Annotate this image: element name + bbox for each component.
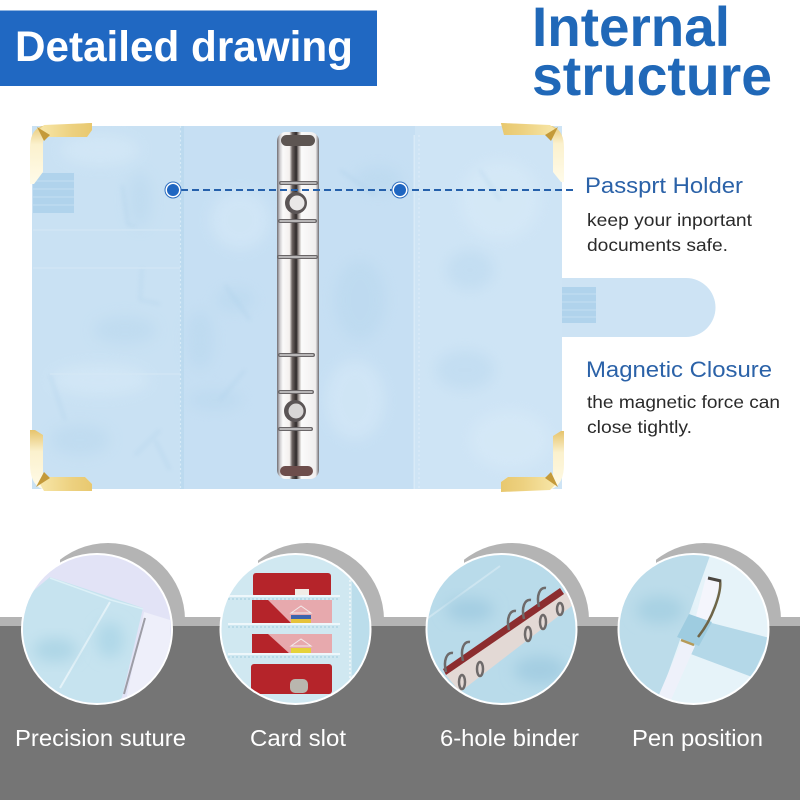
elastic loop bbox=[677, 614, 712, 646]
callout: Passport holder: Passprt Holder bbox=[585, 173, 744, 198]
heading: Detailed drawing: Detailed drawing bbox=[15, 23, 353, 71]
label: Precision suture bbox=[15, 725, 186, 751]
metal ring binder bbox=[277, 132, 319, 479]
gold corners bbox=[30, 123, 564, 492]
gray arc bbox=[60, 543, 185, 617]
feature: card slot bbox=[215, 543, 384, 751]
feature: 6-hole binder bbox=[420, 543, 589, 751]
card 2 bbox=[268, 600, 332, 623]
pocket edges bbox=[228, 596, 340, 654]
detail photo bbox=[618, 553, 770, 705]
label: Card slot bbox=[250, 725, 346, 751]
strap bbox=[692, 623, 767, 676]
label: 6-hole binder bbox=[440, 725, 579, 751]
bottom gray band bbox=[0, 617, 800, 800]
detail photo bbox=[426, 553, 578, 705]
callout: Passport holder: keep your inportant bbox=[587, 210, 752, 230]
callout: Passport holder bbox=[585, 173, 752, 255]
card 3 bbox=[268, 634, 332, 653]
gray arc bbox=[258, 543, 384, 617]
rings bbox=[445, 588, 546, 672]
detail photo bbox=[20, 550, 180, 710]
seams bbox=[180, 126, 184, 489]
pen clip bbox=[698, 580, 720, 637]
book interior bbox=[32, 126, 562, 489]
detail photo bbox=[215, 550, 375, 710]
pen body bbox=[696, 577, 719, 620]
gray arc bbox=[464, 543, 589, 617]
card 4 bbox=[251, 664, 332, 694]
plate and inner strip bbox=[445, 592, 573, 692]
callout: Magnetic closure bbox=[586, 357, 780, 437]
label: Pen position bbox=[632, 725, 763, 751]
gray arc bbox=[656, 543, 781, 617]
callout line: passport holder pointer bbox=[165, 182, 577, 198]
closure tab bbox=[560, 278, 716, 337]
feature: precision suture bbox=[15, 543, 186, 751]
heading: Detailed drawing bbox=[0, 10, 377, 86]
callout: Magnetic closure: the magnetic force can bbox=[587, 392, 780, 412]
feature: pen position bbox=[612, 543, 781, 751]
binder illustration bbox=[30, 123, 716, 492]
callout: Magnetic closure: close tightly. bbox=[587, 417, 692, 437]
pockets bbox=[33, 230, 181, 374]
heading: Internal structure bbox=[532, 0, 772, 107]
callout: Passport holder: documents safe. bbox=[587, 235, 728, 255]
callout: Magnetic closure: Magnetic Closure bbox=[586, 357, 772, 382]
left elastic bbox=[33, 173, 74, 213]
heading: Internal structure: structure bbox=[532, 44, 772, 107]
rivets bbox=[285, 192, 307, 214]
card 1 bbox=[253, 573, 331, 597]
